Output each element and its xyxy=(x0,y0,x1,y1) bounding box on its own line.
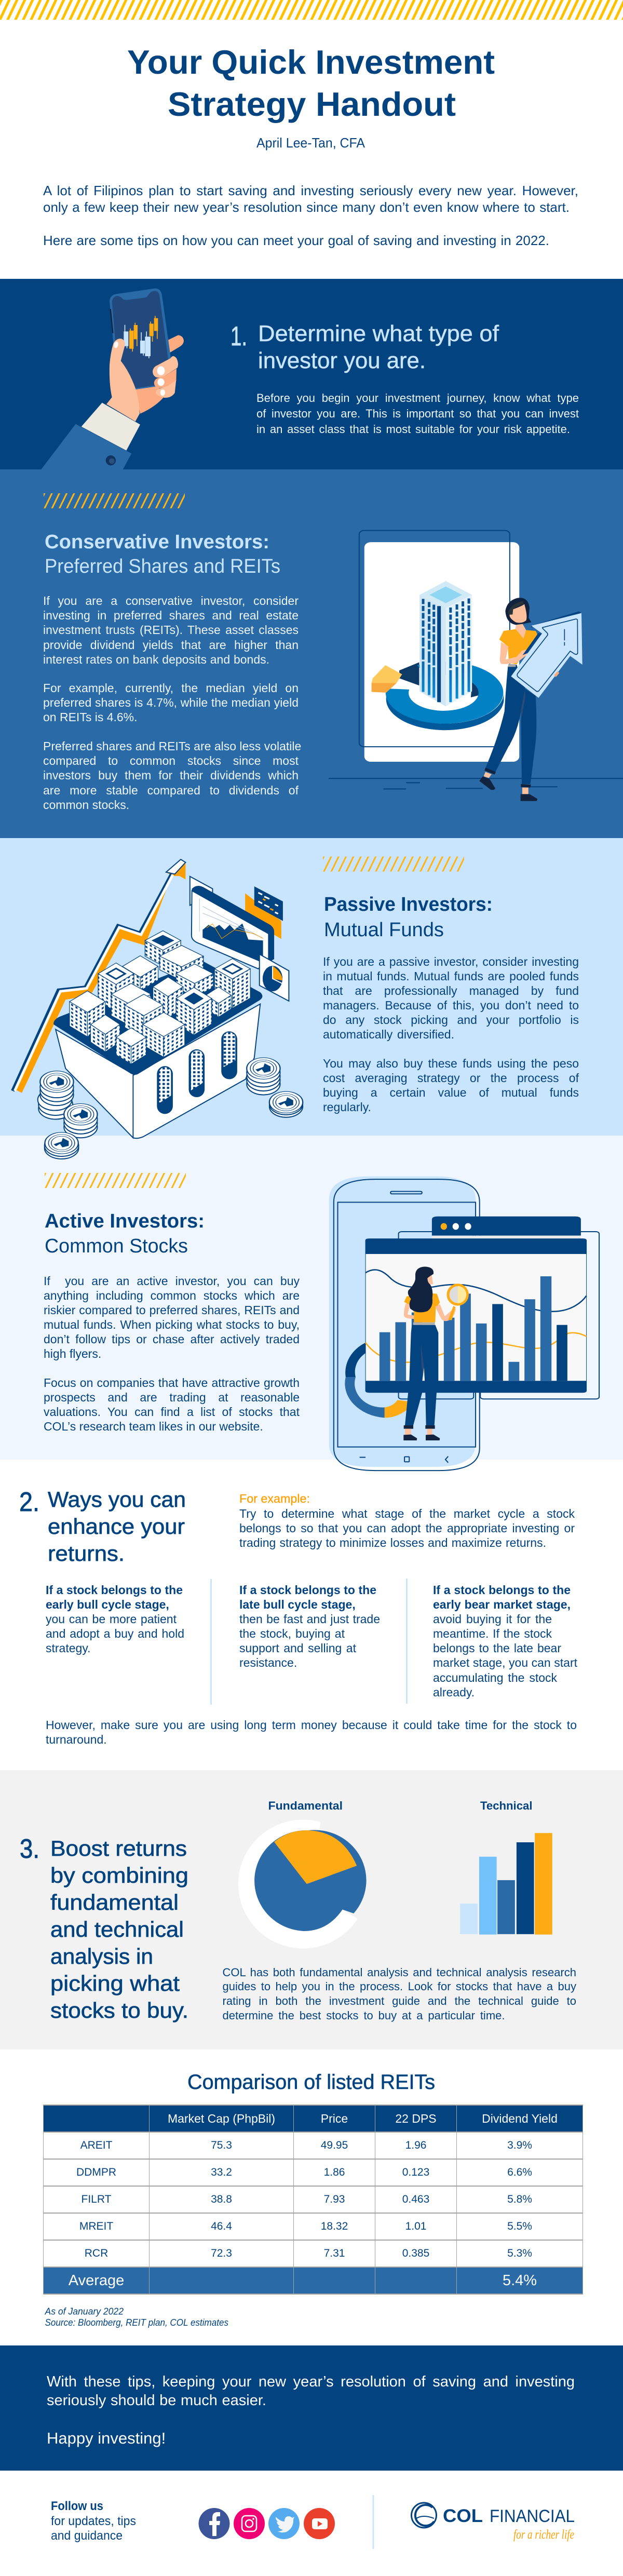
body text: buying a certain value of mutual funds xyxy=(323,1086,579,1099)
step heading: by combining xyxy=(50,1863,188,1887)
body text: prospects and are trading at reasonable xyxy=(44,1391,300,1404)
closing note xyxy=(46,1718,577,1746)
table: listed REITs: 46.4 xyxy=(211,2220,232,2232)
body text: COL’s research team likes in our website. xyxy=(44,1420,263,1433)
table: listed REITs: 5.5% xyxy=(507,2220,532,2232)
table: listed REITs: 5.8% xyxy=(507,2193,532,2205)
table title: Comparison of listed REITs xyxy=(187,2071,435,2094)
step heading: and technical xyxy=(50,1917,184,1941)
column dividers xyxy=(210,1579,408,1705)
step description xyxy=(256,392,579,436)
step description: of investor you are. This is important so that you can invest xyxy=(256,407,579,420)
body text: compared to common stocks since most xyxy=(43,754,299,767)
hatch accent xyxy=(45,1173,186,1188)
table: listed REITs: FILRT xyxy=(82,2193,111,2205)
body text: common stocks. xyxy=(43,798,129,812)
body text: If you are a passive investor, consider investing xyxy=(323,955,579,968)
step heading: Boost returns xyxy=(50,1836,187,1860)
body text: interest rates on bank deposits and bonds. xyxy=(43,653,269,666)
example text: Try to determine what stage of the market cycle a stock xyxy=(239,1507,575,1520)
title xyxy=(127,43,495,123)
column: early bear: meantime. If the stock xyxy=(433,1627,552,1640)
body text: rating in both the investment guide and the technical guide to xyxy=(222,1994,576,2007)
footer divider xyxy=(373,2495,374,2549)
body text: guides to help you in the process. Look for stocks that have a buy xyxy=(222,1980,576,1993)
body text: You may also buy these funds using the peso xyxy=(323,1057,579,1070)
column: early bull: strategy. xyxy=(46,1641,90,1655)
body text: Focus on companies that have attractive growth xyxy=(44,1376,300,1390)
step heading: Determine what type of xyxy=(258,321,499,346)
body text: on REITs is 4.6%. xyxy=(43,710,138,724)
logo: COL Financial: FINANCIAL xyxy=(490,2506,575,2526)
closing text xyxy=(47,2373,575,2447)
source note: Source: Bloomberg, REIT plan, COL estimates xyxy=(45,2317,228,2328)
body text: that are professionally managed by fund xyxy=(323,984,579,997)
body text: don’t follow tips or chase after actively traded xyxy=(44,1332,300,1346)
column: late bull xyxy=(239,1583,380,1669)
heading xyxy=(45,531,280,577)
icon: facebook xyxy=(198,2508,229,2539)
table: listed REITs: 0.385 xyxy=(402,2247,429,2259)
title: Your Quick Investment xyxy=(127,43,495,81)
table: listed REITs: Dividend Yield xyxy=(482,2111,558,2125)
heading: Common Stocks xyxy=(45,1235,188,1257)
table: listed REITs: 33.2 xyxy=(211,2166,232,2178)
body text: cost averaging strategy or the process of xyxy=(323,1071,579,1085)
body text: mutual funds. When picking what stocks to buy, xyxy=(44,1318,300,1331)
column: late bull: late bull cycle stage, xyxy=(239,1598,356,1611)
body text: anything including common stocks which are xyxy=(44,1289,300,1302)
illustration: tower on donut chart with woman holding arrow xyxy=(329,531,623,801)
table: listed REITs: 5.3% xyxy=(507,2247,532,2259)
body text xyxy=(323,1057,579,1114)
column: early bear: belongs to the late bear xyxy=(433,1641,561,1655)
table: listed REITs: 3.9% xyxy=(507,2139,532,2151)
panel: closing message xyxy=(0,2345,623,2471)
panel: step 1 determine investor type xyxy=(0,279,623,469)
icon: twitter xyxy=(268,2508,300,2539)
body text: If you are a conservative investor, consider xyxy=(43,594,299,608)
table: listed REITs: 0.463 xyxy=(402,2193,429,2205)
intro text: Here are some tips on how you can meet your goal of saving and investing in 2022. xyxy=(43,233,549,248)
table: listed REITs: DDMPR xyxy=(76,2166,116,2178)
table: listed REITs: 7.93 xyxy=(324,2193,345,2205)
body text: determine the best stocks to buy at a particular time. xyxy=(222,2009,505,2022)
body text: provide dividend yields that are higher than xyxy=(43,638,299,652)
closing text: Happy investing! xyxy=(47,2429,166,2447)
column: early bear: avoid buying it for the xyxy=(433,1612,552,1626)
body text xyxy=(43,739,301,812)
illustration: phone with bar chart and woman with magnifier xyxy=(329,1177,599,1471)
body text: investing in preferred shares and real estate xyxy=(43,609,299,622)
column: late bull: the stock, buying at xyxy=(239,1627,345,1640)
table: listed REITs: AREIT xyxy=(80,2139,112,2151)
column: early bull: you can be more patient xyxy=(46,1612,177,1626)
body text xyxy=(44,1376,300,1433)
title: Strategy Handout xyxy=(168,85,456,123)
intro text: only a few keep their new year’s resolution since many don’t even know where to start. xyxy=(43,199,570,215)
step number: 2. xyxy=(19,1487,39,1517)
table: listed REITs: MREIT xyxy=(79,2220,113,2232)
example text: trading strategy to minimize losses and maximize returns. xyxy=(239,1536,546,1549)
body text: If you are an active investor, you can buy xyxy=(44,1274,300,1288)
column: early bull: and adopt a buy and hold xyxy=(46,1627,184,1640)
icon: youtube xyxy=(304,2508,335,2539)
label: fundamental: Fundamental xyxy=(268,1799,343,1812)
top hazard stripe xyxy=(0,0,623,20)
body text: COL has both fundamental analysis and technical analysis research xyxy=(222,1966,576,1978)
column: early bear xyxy=(433,1583,577,1699)
example text xyxy=(239,1507,575,1549)
body text: in mutual funds. Mutual funds are pooled funds xyxy=(323,969,579,983)
column: early bear: accumulating the stock xyxy=(433,1671,557,1684)
body text: investment trusts (REITs). These asset classes xyxy=(43,623,299,637)
chart: fundamental pie xyxy=(238,1819,367,1948)
icon: hand holding phone with candlestick chart xyxy=(41,288,184,469)
heading: Mutual Funds xyxy=(324,919,444,941)
label: technical: Technical xyxy=(480,1799,533,1812)
column: early bear: If a stock belongs to the xyxy=(433,1583,571,1597)
closing text: seriously should be much easier. xyxy=(47,2392,266,2409)
panel: conservative investors xyxy=(0,469,623,838)
table: listed REITs: 49.95 xyxy=(321,2139,348,2151)
table: listed REITs: RCR xyxy=(85,2247,108,2259)
intro text xyxy=(43,183,578,248)
step heading: investor you are. xyxy=(258,348,426,373)
example text: belongs to so that you can adopt the appropriate investing or xyxy=(239,1521,575,1535)
table: listed REITs: 22 DPS xyxy=(395,2111,437,2125)
body text xyxy=(323,955,579,1041)
logo: COL Financial: COL xyxy=(443,2506,483,2526)
table: listed REITs: 0.123 xyxy=(402,2166,429,2178)
panel: REIT comparison xyxy=(43,2071,583,2328)
author: April Lee-Tan, CFA xyxy=(256,135,365,151)
body text xyxy=(43,681,299,724)
table: listed REITs: 75.3 xyxy=(211,2139,232,2151)
table: listed REITs: 1.86 xyxy=(324,2166,345,2178)
body text xyxy=(222,1966,576,2022)
panel: header xyxy=(0,0,623,248)
body text: regularly. xyxy=(323,1100,371,1114)
step heading xyxy=(258,321,499,373)
step heading: picking what xyxy=(50,1971,180,1995)
body text: riskier compared to preferred shares, REITs and xyxy=(44,1303,300,1317)
follow us text: and guidance xyxy=(51,2529,123,2543)
column: early bull xyxy=(46,1583,184,1655)
column: late bull: resistance. xyxy=(239,1656,297,1669)
table: listed REITs: 1.01 xyxy=(405,2220,426,2232)
heading xyxy=(45,1210,205,1257)
table: listed REITs: 5.4% xyxy=(503,2272,537,2289)
closing note: However, make sure you are using long term money because it could take time for the stock to xyxy=(46,1718,577,1732)
body text: automatically diversified. xyxy=(323,1028,454,1041)
follow us text xyxy=(51,2499,136,2543)
follow us text: for updates, tips xyxy=(51,2514,136,2528)
logo: COL Financial: for a richer life xyxy=(513,2528,574,2542)
column: early bear: already. xyxy=(433,1685,475,1699)
body text: valuations. You can find a list of stocks that xyxy=(44,1405,300,1419)
step heading: fundamental xyxy=(50,1890,179,1914)
source note: As of January 2022 xyxy=(45,2307,124,2317)
coin stacks xyxy=(38,1062,303,1159)
icon: instagram xyxy=(234,2508,265,2539)
table: listed REITs: 38.8 xyxy=(211,2193,232,2205)
step description: in an asset class that is most suitable for your risk appetite. xyxy=(256,423,570,436)
closing text: With these tips, keeping your new year’s resolution of saving and investing xyxy=(47,2373,575,2390)
for example label: For example: xyxy=(239,1492,310,1505)
chart: technical bars xyxy=(460,1833,552,1935)
table: listed REITs: 72.3 xyxy=(211,2247,232,2259)
illustration: city on bag with rising arrow xyxy=(12,859,303,1159)
step heading: Ways you can xyxy=(48,1487,186,1512)
heading: Passive Investors: xyxy=(324,894,493,915)
body text xyxy=(44,1274,300,1360)
step number: 3. xyxy=(20,1834,39,1864)
table: listed REITs: Market Cap (PhpBil) xyxy=(168,2111,275,2125)
table: listed REITs: Average xyxy=(69,2272,124,2289)
table: listed REITs: 7.31 xyxy=(324,2247,345,2259)
intro text: A lot of Filipinos plan to start saving and investing seriously every new year. However, xyxy=(43,183,578,198)
step heading xyxy=(50,1836,188,2022)
step heading xyxy=(48,1487,186,1566)
column: early bull: early bull cycle stage, xyxy=(46,1598,169,1611)
table: listed REITs xyxy=(43,2105,583,2295)
body text: For example, currently, the median yield on xyxy=(43,681,299,695)
hatch accent xyxy=(323,857,464,871)
body text: do any stock picking and your portfolio is xyxy=(323,1013,579,1027)
column: late bull: support and selling at xyxy=(239,1641,356,1655)
column: early bear: early bear market stage, xyxy=(433,1598,571,1611)
step number: 1. xyxy=(231,321,247,352)
step heading: analysis in xyxy=(50,1944,153,1968)
panel: active investors xyxy=(0,1136,623,1460)
body text: preferred shares is 4.7%, while the median yield xyxy=(43,696,299,709)
body text xyxy=(43,594,299,666)
column: late bull: then be fast and just trade xyxy=(239,1612,380,1626)
panel: step 2 ways to enhance returns xyxy=(19,1487,577,1746)
column: early bear: market stage, you can start xyxy=(433,1656,577,1669)
step heading: enhance your xyxy=(48,1514,185,1539)
heading xyxy=(324,894,493,941)
body text: high flyers. xyxy=(44,1347,101,1360)
heading: Active Investors: xyxy=(45,1210,205,1232)
heading: Preferred Shares and REITs xyxy=(45,556,280,577)
panel: passive investors xyxy=(0,838,623,1136)
column: early bull: If a stock belongs to the xyxy=(46,1583,183,1597)
follow us text: Follow us xyxy=(51,2499,103,2513)
column: late bull: If a stock belongs to the xyxy=(239,1583,376,1597)
panel: footer xyxy=(51,2495,575,2549)
heading: Conservative Investors: xyxy=(45,531,269,553)
logo: COL Financial xyxy=(411,2503,575,2542)
source note xyxy=(45,2307,228,2328)
table: listed REITs: 1.96 xyxy=(405,2139,426,2151)
step description: Before you begin your investment journey, know what type xyxy=(256,392,579,404)
panel: step 3 fundamental and technical xyxy=(0,1770,623,2049)
body text: Preferred shares and REITs are also less volatile xyxy=(43,739,301,753)
step heading: returns. xyxy=(48,1541,125,1566)
body text: investors buy them for their dividends which xyxy=(43,768,299,782)
table: listed REITs: 6.6% xyxy=(507,2166,532,2178)
table: listed REITs: 18.32 xyxy=(321,2220,348,2232)
table: listed REITs: Price xyxy=(321,2111,348,2125)
closing note: turnaround. xyxy=(46,1733,107,1746)
hatch accent xyxy=(44,493,185,508)
step heading: stocks to buy. xyxy=(50,1998,188,2022)
body text: managers. Because of this, you don’t need to xyxy=(323,999,579,1012)
body text: are more stable compared to dividends of xyxy=(43,784,299,797)
